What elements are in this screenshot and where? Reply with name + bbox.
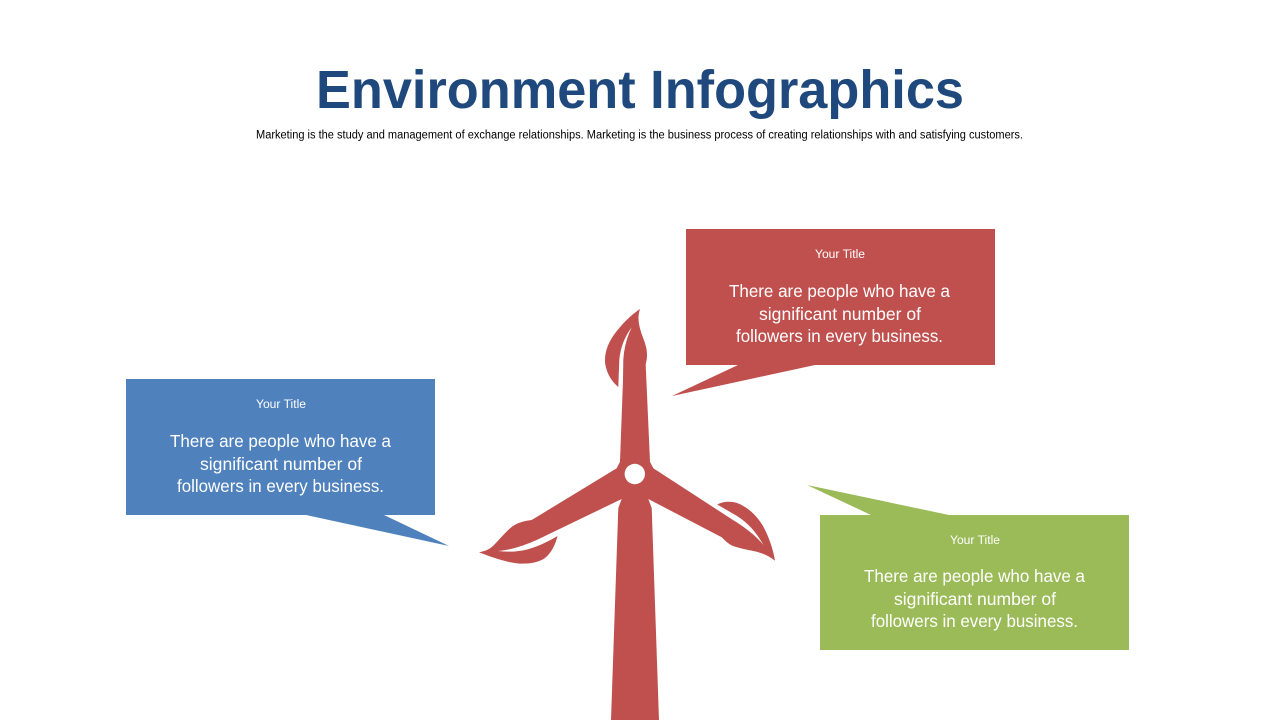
icon: wind turbine with leaf blades [479, 309, 775, 720]
callout body text: significant number of [894, 589, 1056, 609]
callout: red [672, 229, 995, 396]
callout body text: significant number of [200, 454, 362, 474]
callout body text: There are people who have a [864, 566, 1085, 586]
turbine silhouette [479, 309, 775, 720]
callout body text: There are people who have a [729, 281, 950, 301]
callout shape [807, 485, 1129, 650]
callout body text: followers in every business. [871, 611, 1078, 631]
callout: green [807, 485, 1129, 650]
callout heading: Your Title [950, 535, 1000, 547]
callout body text [864, 566, 1085, 631]
callout: blue [126, 379, 449, 546]
subtitle: Marketing is the study and management of exchange relationships. Marketing is the business process of creating relationships with and satisfying customers. [256, 130, 1023, 142]
callout body text [729, 281, 950, 346]
callout shape [126, 379, 449, 546]
turbine hub [625, 464, 645, 484]
callout body text: followers in every business. [736, 326, 943, 346]
callout body text: There are people who have a [170, 431, 391, 451]
title: Environment Infographics [316, 60, 964, 120]
callout shape [672, 229, 995, 396]
callout heading: Your Title [256, 399, 306, 411]
callout body text [170, 431, 391, 496]
callout body text: significant number of [759, 304, 921, 324]
callout heading: Your Title [815, 249, 865, 261]
callout body text: followers in every business. [177, 476, 384, 496]
